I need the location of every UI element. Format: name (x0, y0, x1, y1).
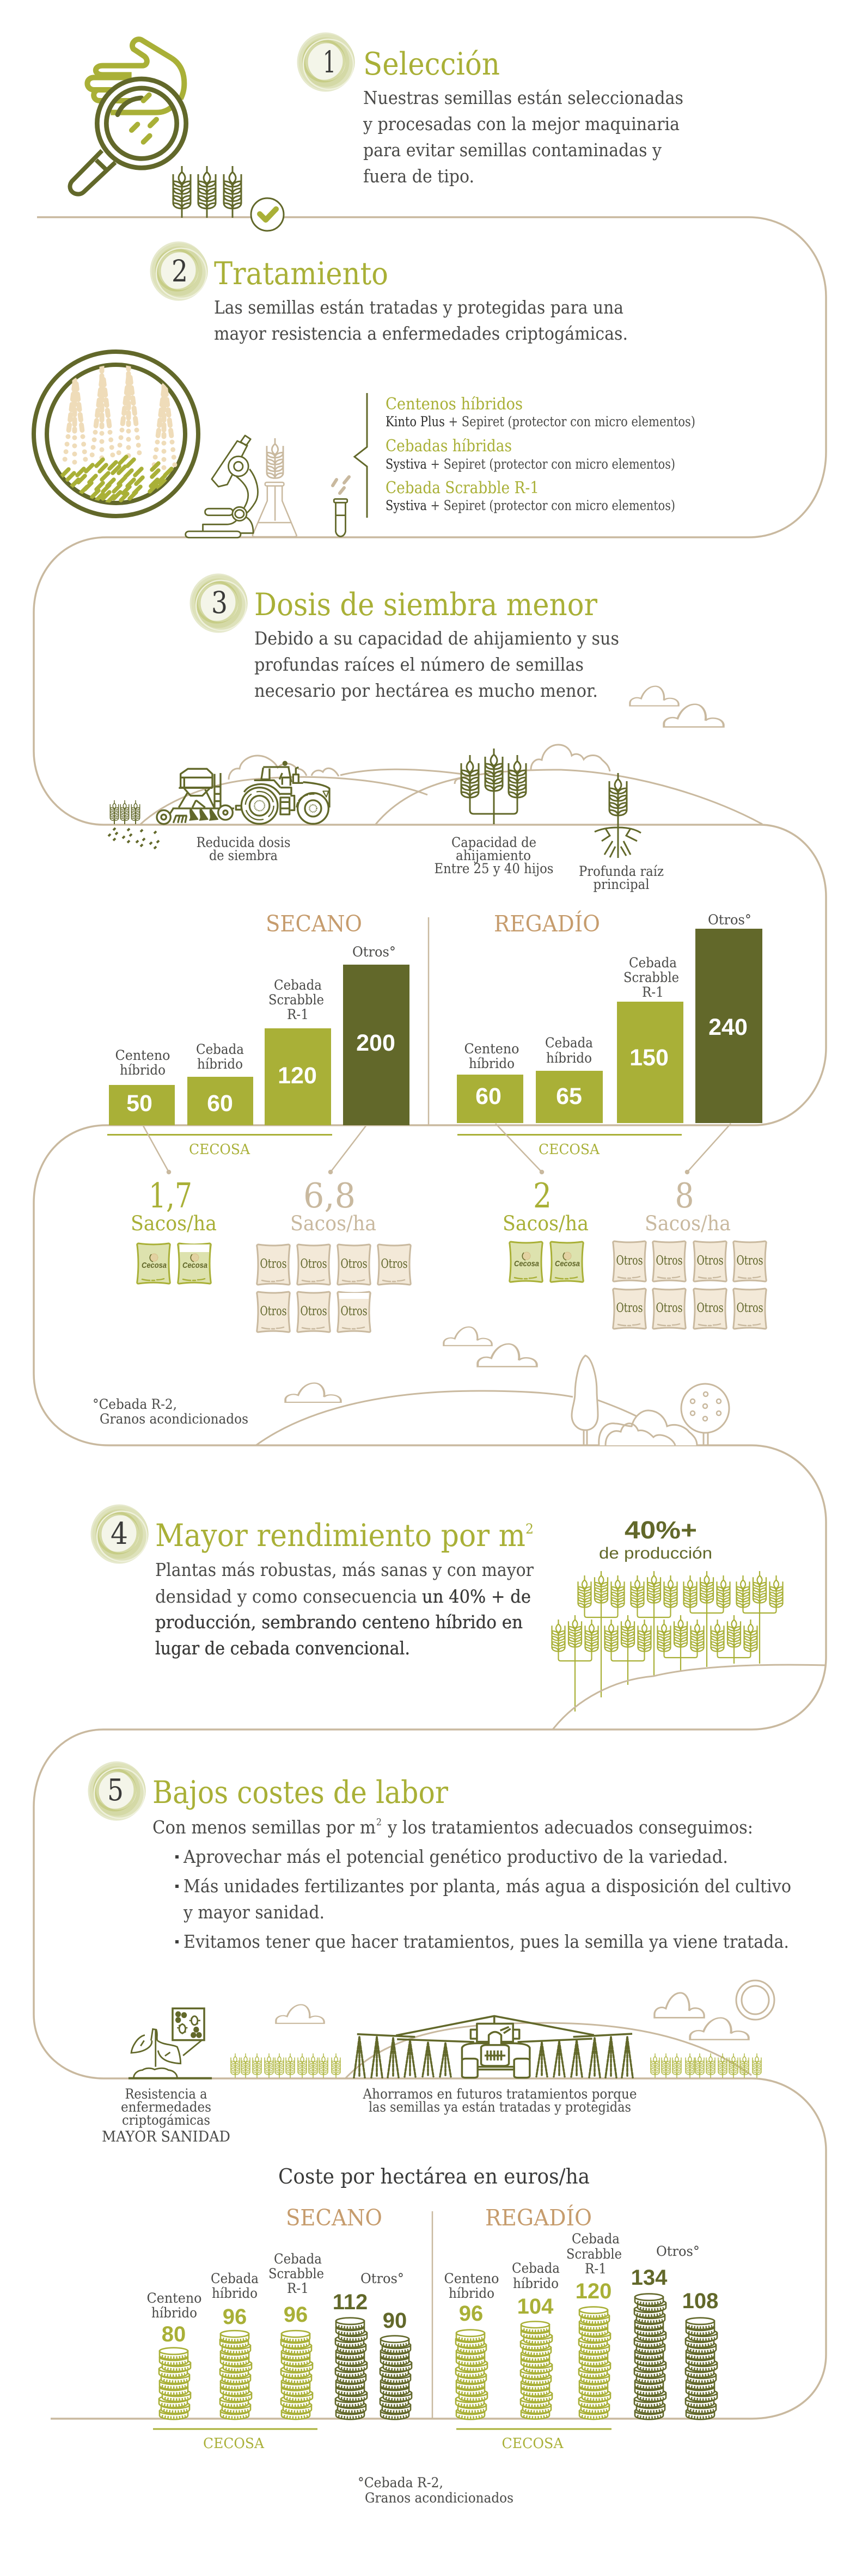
figure: 1,7 sacos (131, 1176, 217, 1235)
bar: cebada scrabble 120: Cebada (274, 977, 322, 993)
bar chart: seeding dose (107, 910, 762, 1174)
text block: rendimiento: densidad y como consecuencia (155, 1586, 417, 1607)
heading: secano: SECANO (286, 2205, 382, 2231)
stack: cebada hibrido 104: 104 (517, 2295, 554, 2319)
text block: dosis: profundas raíces el número de semillas (254, 654, 584, 675)
bar: otros 200: 200 (356, 1030, 395, 1056)
stack: otros 112: 112 (333, 2290, 368, 2314)
stack: cebada scrabble 120: Cebada (572, 2231, 620, 2247)
bar: cebada hibrido 65: híbrido (546, 1050, 592, 1066)
bar: cebada scrabble 150: R-1 (642, 984, 664, 1001)
bar: cebada hibrido 65 (536, 1035, 603, 1123)
figure: 2 sacos: Sacos/ha (503, 1212, 589, 1235)
heading: mayor rendimiento: Mayor rendimiento por m (155, 1518, 525, 1554)
list of treatments: Systiva + Sepiret (protector con micro elementos) (386, 498, 675, 513)
text block: tratamiento: mayor resistencia a enfermedades criptogámicas. (214, 323, 628, 344)
bar: cebada scrabble 150 (617, 955, 683, 1123)
icon: spraying tractor (354, 2016, 633, 2078)
step number 5: 5 (107, 1772, 124, 1807)
stack: otros 108: 108 (682, 2289, 718, 2313)
stack: centeno hibrido 96: 96 (459, 2302, 483, 2326)
stack: cebada scrabble 120: 120 (576, 2279, 611, 2303)
bar: otros 240: Otros° (708, 912, 751, 928)
stack: otros 112 (333, 2290, 368, 2419)
caption: ahorramos: las semillas ya están tratadas y protegidas (369, 2099, 631, 2115)
stack: cebada scrabble 120 (566, 2231, 622, 2419)
step number 2 (152, 244, 206, 298)
list of treatments: Cebadas híbridas (386, 437, 512, 456)
icons: otros sacks secano: Otros (301, 1304, 327, 1318)
stack: otros 90 (360, 2271, 412, 2419)
heading: bajos costes: Bajos costes de labor (152, 1775, 449, 1811)
chart title: Coste por hectárea en euros/ha (278, 2164, 590, 2188)
bar: cebada scrabble 120 (265, 977, 331, 1125)
bar: cebada scrabble 120: R-1 (287, 1007, 309, 1023)
label: profunda raiz: Profunda raíz (579, 863, 664, 880)
stack: centeno hibrido 96: híbrido (449, 2285, 494, 2302)
text block: dosis: Debido a su capacidad de ahijamiento y sus (254, 628, 619, 649)
panel: sacks per hectare (93, 1176, 766, 1445)
bullet list: Más unidades fertilizantes por planta, más agua a disposición del cultivo (184, 1875, 791, 1897)
bar: cebada scrabble 120: 120 (278, 1063, 317, 1089)
bar: otros 200 (343, 944, 409, 1125)
bar: centeno hibrido 50 (109, 1047, 175, 1125)
text block: seleccion: y procesadas con la mejor maquinaria (363, 113, 680, 134)
text block: rendimiento: producción, sembrando centeno híbrido en (155, 1611, 523, 1633)
icon: wheat row left (231, 2053, 340, 2078)
icon: tractor with seeder (157, 762, 329, 824)
label: reducida dosis: Reducida dosis (196, 835, 291, 851)
text block: intro: Con menos semillas por m (152, 1817, 376, 1838)
landscape hills and clouds (140, 745, 762, 824)
label: capacidad de ahijamiento: ahijamiento (456, 848, 531, 864)
text block: intro: y los tratamientos adecuados conseguimos: (387, 1817, 753, 1838)
icon: wheat row right (651, 2053, 761, 2078)
text block: dosis: necesario por hectárea es mucho menor. (254, 680, 598, 701)
icons: cecosa sacks regadio: Cecosa (514, 1259, 539, 1268)
bar: cebada hibrido 60: Cebada (196, 1041, 244, 1058)
text block: seleccion: fuera de tipo. (363, 165, 474, 187)
stack: centeno hibrido 80: 80 (162, 2322, 186, 2346)
panel: step 5 bajos costes (90, 1764, 791, 2145)
icon: wheat with deep root (595, 773, 641, 858)
icon: flask with wheat (253, 438, 297, 537)
step number 3 (192, 576, 246, 630)
label: capacidad de ahijamiento: Entre 25 y 40 hijos (435, 861, 553, 877)
icons: otros sacks regadio: Otros (656, 1254, 683, 1268)
icons: otros sacks secano: Otros (381, 1257, 407, 1271)
heading: tratamiento: Tratamiento (214, 256, 388, 292)
stack: cebada hibrido 96: híbrido (212, 2285, 258, 2302)
stack: cebada scrabble 120: R-1 (585, 2261, 607, 2277)
icons: otros sacks regadio: Otros (616, 1254, 643, 1268)
label: reducida dosis (196, 835, 291, 864)
chart divider (428, 917, 429, 1125)
bar: cebada scrabble 150: Scrabble (623, 970, 679, 986)
icons: otros sacks regadio: Otros (697, 1254, 723, 1268)
caption: mayor sanidad: MAYOR SANIDAD (102, 2129, 230, 2145)
stack: cebada hibrido 96: Cebada (211, 2271, 259, 2287)
hill (553, 1665, 826, 1729)
panel: step 4 mayor rendimiento (93, 1507, 826, 1729)
list of treatments (386, 395, 695, 513)
list of treatments: Kinto Plus + Sepiret (protector con micro elementos) (386, 414, 695, 430)
stack: otros 134: 134 (631, 2266, 668, 2290)
bar: centeno hibrido 60: Centeno (464, 1041, 519, 1057)
bar: centeno hibrido 60: 60 (475, 1083, 502, 1109)
icon: small wheat and seeds (108, 800, 159, 849)
icon: microscope (186, 436, 258, 538)
heading: regadio: REGADÍO (485, 2204, 592, 2231)
icons: otros sacks regadio: Otros (736, 1301, 763, 1315)
footnote (358, 2475, 513, 2506)
icon: hand and magnifier (70, 39, 186, 194)
hill behind sprayer (346, 2023, 751, 2078)
icon: tillering wheat (461, 749, 526, 824)
bullet list: y mayor sanidad. (183, 1902, 325, 1923)
text block: rendimiento (155, 1559, 534, 1659)
icons: cecosa sacks secano: Cecosa (182, 1261, 207, 1270)
chart divider (432, 2211, 433, 2419)
flowing section outline (34, 217, 826, 2419)
callout: 40%: de producción (599, 1544, 712, 1562)
panel: step 3 dosis de siembra (108, 576, 762, 893)
stack: centeno hibrido 96 (444, 2271, 499, 2419)
label: profunda raiz: principal (594, 876, 649, 893)
caption: mayor sanidad: Resistencia a (125, 2086, 207, 2102)
bullet list: Aprovechar más el potencial genético productivo de la variedad. (183, 1846, 728, 1867)
figure: 6,8 sacos: 6,8 (303, 1176, 356, 1216)
text block: tratamiento (214, 297, 628, 344)
heading: dosis de siembra: Dosis de siembra menor (254, 587, 598, 623)
stack: centeno hibrido 96: Centeno (444, 2271, 499, 2287)
text block: intro (152, 1817, 753, 1838)
stack: centeno hibrido 80: híbrido (151, 2305, 197, 2321)
icons: otros sacks secano (257, 1244, 411, 1332)
stack: cebada hibrido 104 (512, 2260, 560, 2419)
icons: cecosa sacks secano: Cecosa (142, 1261, 167, 1270)
bracket (354, 393, 367, 518)
bar: centeno hibrido 60 (457, 1041, 523, 1123)
stack: cebada scrabble 96 (268, 2251, 324, 2419)
bar: cebada scrabble 120: Scrabble (268, 992, 324, 1008)
caption: mayor sanidad (102, 2086, 230, 2145)
text block: rendimiento: lugar de cebada convencional. (155, 1637, 410, 1659)
stack: centeno hibrido 80: Centeno (147, 2290, 201, 2307)
bar: otros 240 (695, 912, 762, 1123)
pointer lines (143, 1124, 731, 1174)
figure: 6,8 sacos (290, 1176, 376, 1235)
step number 1 (299, 35, 353, 89)
icons: otros sacks regadio: Otros (656, 1301, 683, 1315)
bar: cebada hibrido 60: 60 (207, 1090, 233, 1117)
footnote: °Cebada R-2, (358, 2475, 443, 2491)
stack: centeno hibrido 80 (147, 2290, 201, 2419)
icons: otros sacks secano: Otros (341, 1257, 367, 1271)
bar: centeno hibrido 50: Centeno (115, 1047, 170, 1064)
step number 4 (93, 1507, 147, 1561)
icon: clouds (630, 686, 724, 727)
icons: otros sacks regadio: Otros (736, 1254, 763, 1268)
landscape: clouds, hill and trees (256, 1327, 729, 1445)
stack: otros 90: 90 (383, 2309, 407, 2333)
text block: seleccion: para evitar semillas contaminadas y (363, 139, 662, 161)
chart: cost per hectare coin stacks (147, 2164, 718, 2506)
bar: centeno hibrido 50: híbrido (120, 1062, 166, 1078)
bar: cebada hibrido 60: híbrido (197, 1056, 243, 1072)
bar: cebada hibrido 65: Cebada (545, 1035, 593, 1051)
icons: otros sacks regadio (613, 1241, 766, 1329)
icons: otros sacks regadio: Otros (697, 1301, 723, 1315)
callout: 40% (599, 1516, 712, 1562)
cecosa bracket regadio: CECOSA (539, 1142, 600, 1158)
stack: cebada hibrido 104: Cebada (512, 2260, 560, 2277)
step number 3: 3 (211, 585, 228, 620)
figure: 8 sacos: 8 (675, 1176, 694, 1216)
bar: cebada scrabble 150: 150 (629, 1045, 669, 1071)
label: profunda raiz (579, 863, 664, 893)
bar: cebada scrabble 150: Cebada (629, 955, 677, 971)
stack: cebada scrabble 96: 96 (284, 2303, 308, 2327)
icon: three wheat ears (173, 166, 241, 218)
stack: cebada hibrido 104: híbrido (513, 2276, 559, 2292)
panel: step 2 tratamiento (34, 244, 695, 538)
step number 1: 1 (323, 45, 336, 79)
step number 2: 2 (172, 254, 188, 289)
figure: 2 sacos: 2 (533, 1176, 552, 1216)
bar: cebada hibrido 65: 65 (556, 1083, 582, 1109)
stack: otros 134 (631, 2266, 668, 2419)
label: reducida dosis: de siembra (209, 848, 278, 864)
icons: cecosa sacks secano (137, 1243, 211, 1284)
caption: ahorramos: Ahorramos en futuros tratamientos porque (363, 2086, 637, 2102)
bar: centeno hibrido 50: 50 (126, 1090, 152, 1117)
stack: cebada scrabble 96: Scrabble (268, 2266, 324, 2282)
cecosa bracket secano: CECOSA (203, 2436, 265, 2452)
footnote: Granos acondicionados (100, 1411, 248, 1427)
figure: 8 sacos: Sacos/ha (645, 1212, 731, 1235)
stack: cebada hibrido 96: 96 (223, 2305, 247, 2329)
figure: 2 sacos (503, 1176, 589, 1235)
footnote: °Cebada R-2, (93, 1396, 177, 1413)
footnote: Granos acondicionados (365, 2490, 513, 2506)
cecosa bracket regadio: CECOSA (502, 2436, 564, 2452)
icon: big lens with seeds (34, 352, 198, 516)
icon: check mark (251, 198, 284, 231)
step number 4: 4 (111, 1516, 128, 1551)
label: capacidad de ahijamiento: Capacidad de (451, 835, 536, 851)
figure: 1,7 sacos: Sacos/ha (131, 1212, 217, 1235)
stack: cebada hibrido 96 (211, 2271, 259, 2419)
text block: dosis (254, 628, 619, 701)
list of treatments: Centenos híbridos (386, 395, 523, 414)
figure: 6,8 sacos: Sacos/ha (290, 1212, 376, 1235)
caption: mayor sanidad: criptogámicas (122, 2112, 210, 2129)
icons: otros sacks secano: Otros (260, 1304, 286, 1318)
text block: seleccion: Nuestras semillas están seleccionadas (363, 87, 683, 108)
panel: step 1 seleccion (70, 35, 683, 231)
text block: intro: 2 (376, 1817, 382, 1828)
stack: cebada scrabble 120: Scrabble (566, 2246, 622, 2262)
bar: otros 240: 240 (708, 1014, 748, 1040)
icons: otros sacks regadio: Otros (616, 1301, 643, 1315)
icons: otros sacks secano: Otros (260, 1257, 286, 1271)
icon: test tube and seeds (333, 477, 349, 536)
bullet list (175, 1846, 791, 1952)
figure: 8 sacos (645, 1176, 731, 1235)
caption: ahorramos (363, 2086, 637, 2115)
stack: cebada scrabble 96: Cebada (274, 2251, 322, 2267)
stack: cebada scrabble 96: R-1 (287, 2280, 309, 2297)
icon: sun and clouds (276, 1980, 774, 2040)
icon: plant and pest sign (129, 2008, 212, 2078)
icon: wheat field (552, 1571, 783, 1712)
text block: rendimiento: Plantas más robustas, más sanas y con mayor (155, 1559, 534, 1580)
label: capacidad de ahijamiento (435, 835, 553, 877)
figure: 1,7 sacos: 1,7 (149, 1176, 192, 1216)
list of treatments: Systiva + Sepiret (protector con micro elementos) (386, 456, 675, 472)
bullet list: Evitamos tener que hacer tratamientos, pues la semilla ya viene tratada. (184, 1931, 789, 1952)
heading: seleccion: Selección (363, 46, 500, 82)
text block: tratamiento: Las semillas están tratadas y protegidas para una (214, 297, 623, 318)
icons: otros sacks secano: Otros (341, 1304, 367, 1318)
cecosa bracket secano: CECOSA (189, 1142, 250, 1158)
list of treatments: Cebada Scrabble R-1 (386, 479, 539, 498)
text block: seleccion (363, 87, 683, 187)
stack: otros 90: Otros° (360, 2271, 404, 2287)
bar: cebada hibrido 60 (187, 1041, 253, 1125)
heading: mayor rendimiento: 2 (525, 1521, 534, 1537)
heading: regadio: REGADÍO (494, 910, 600, 937)
callout: 40%: 40%+ (625, 1516, 697, 1544)
bar: otros 200: Otros° (352, 944, 396, 960)
bar: centeno hibrido 60: híbrido (469, 1056, 515, 1072)
icons: otros sacks secano: Otros (301, 1257, 327, 1271)
icons: cecosa sacks regadio (510, 1242, 583, 1282)
footnote (93, 1396, 248, 1427)
caption: mayor sanidad: enfermedades (121, 2099, 211, 2115)
text block: rendimiento: un 40% + de (422, 1586, 531, 1607)
icons: cecosa sacks regadio: Cecosa (555, 1259, 580, 1268)
stack: otros 108 (656, 2243, 718, 2419)
step number 5 (90, 1764, 144, 1818)
stack: otros 108: Otros° (656, 2243, 700, 2260)
heading: secano: SECANO (266, 911, 362, 937)
